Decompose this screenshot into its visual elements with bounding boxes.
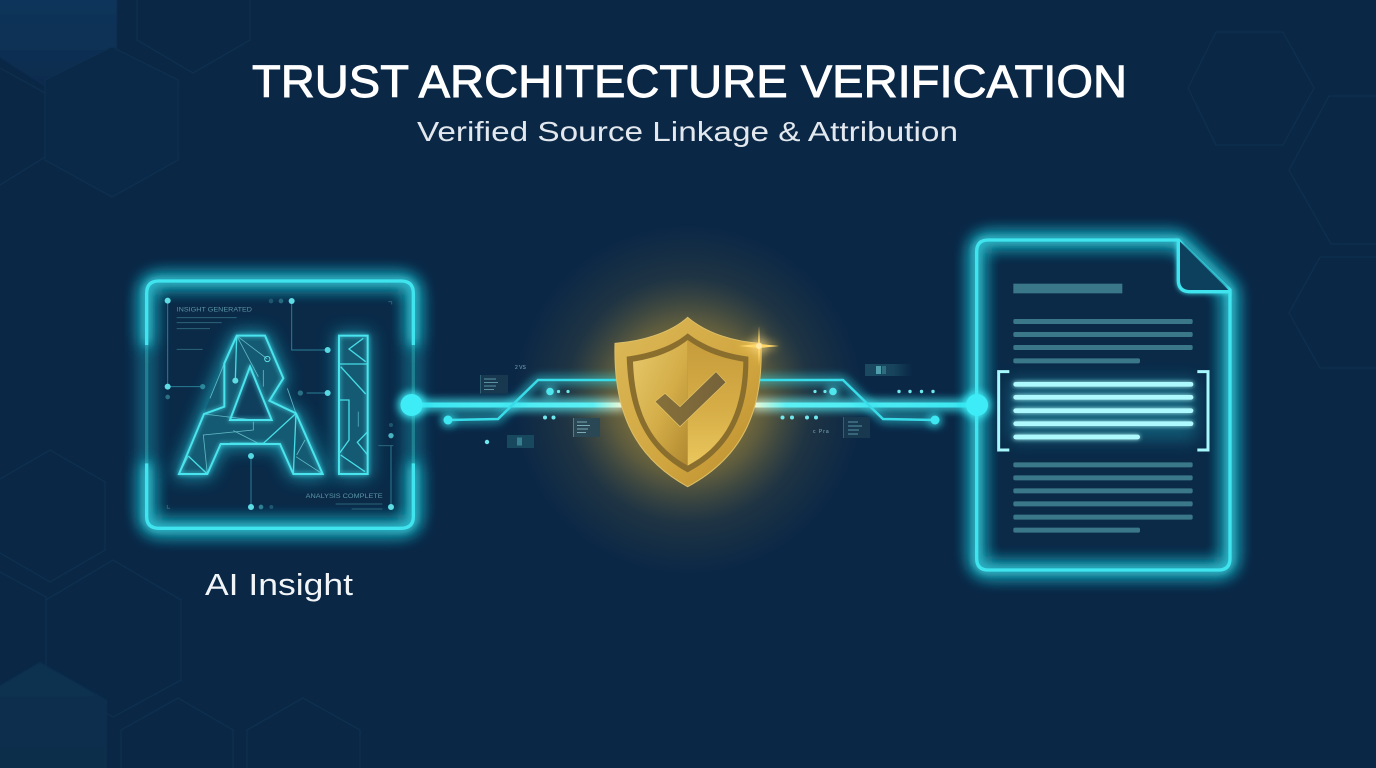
upper branch right [752,380,935,420]
page fold [1178,240,1230,292]
I outline [339,336,368,474]
card inner glow [147,281,413,528]
node dots right [780,388,935,420]
label: analysis complete: ANALYSIS COMPLETE [306,493,383,500]
highlighted glow backdrop [1010,380,1197,440]
document outline [977,240,1230,570]
mini fading box [865,364,912,376]
micro text lines [167,302,393,509]
I inner lines [339,338,368,472]
letter I glow [335,332,372,478]
text lines upper [1013,319,1193,363]
document node [966,394,988,416]
main line left [411,402,625,408]
A inner triangle [230,367,272,420]
circuit traces [168,301,391,507]
AI Insight label: AI Insight [205,568,354,602]
node dots left [485,388,570,444]
tiny label right: c Pra [813,429,830,435]
shield halo [513,225,863,575]
selection brackets [999,372,1208,450]
connector: left [411,365,625,448]
shield inner ring [627,333,748,472]
sparkle [739,326,779,366]
mini teal box [507,435,534,448]
branch node right [930,416,940,424]
shield outer [615,317,761,487]
letter A [179,336,323,474]
A inner lines [179,336,323,474]
tiny label left: 2 VS [515,365,527,371]
A ring [265,356,270,362]
mini panel 1 [480,375,508,394]
shield left half [633,340,688,466]
mini panel 2 [573,418,600,437]
letter A glow [179,336,323,474]
A outline [179,336,323,474]
branch node left [444,416,452,424]
A counter [230,367,272,420]
document heading bar [1013,284,1122,293]
main line right [752,402,977,408]
panel: source document [977,240,1230,570]
card background [147,281,413,528]
text lines lower [1013,462,1193,533]
document body [977,240,1230,570]
document inner glow [977,240,1230,570]
subtitle: Verified Source Linkage & Attribution [417,116,958,147]
A facets [179,336,323,474]
I body [339,336,368,474]
icon: gold shield [615,317,761,487]
label: insight generated: INSIGHT GENERATED [177,307,252,314]
upper branch left [448,380,625,420]
circuit dots [165,298,394,510]
letter I [339,336,368,474]
connector: right [752,364,977,438]
title: TRUST ARCHITECTURE VERIFICATION [252,56,1127,107]
mini panel 3 [843,417,870,438]
highlighted lines [1013,382,1193,439]
card dim side segments [147,345,413,463]
card frame [147,281,413,528]
A node [232,378,238,384]
check mark [655,372,726,427]
shield right half [688,340,743,466]
panel: AI insight card [147,281,413,528]
AI node [400,394,422,416]
